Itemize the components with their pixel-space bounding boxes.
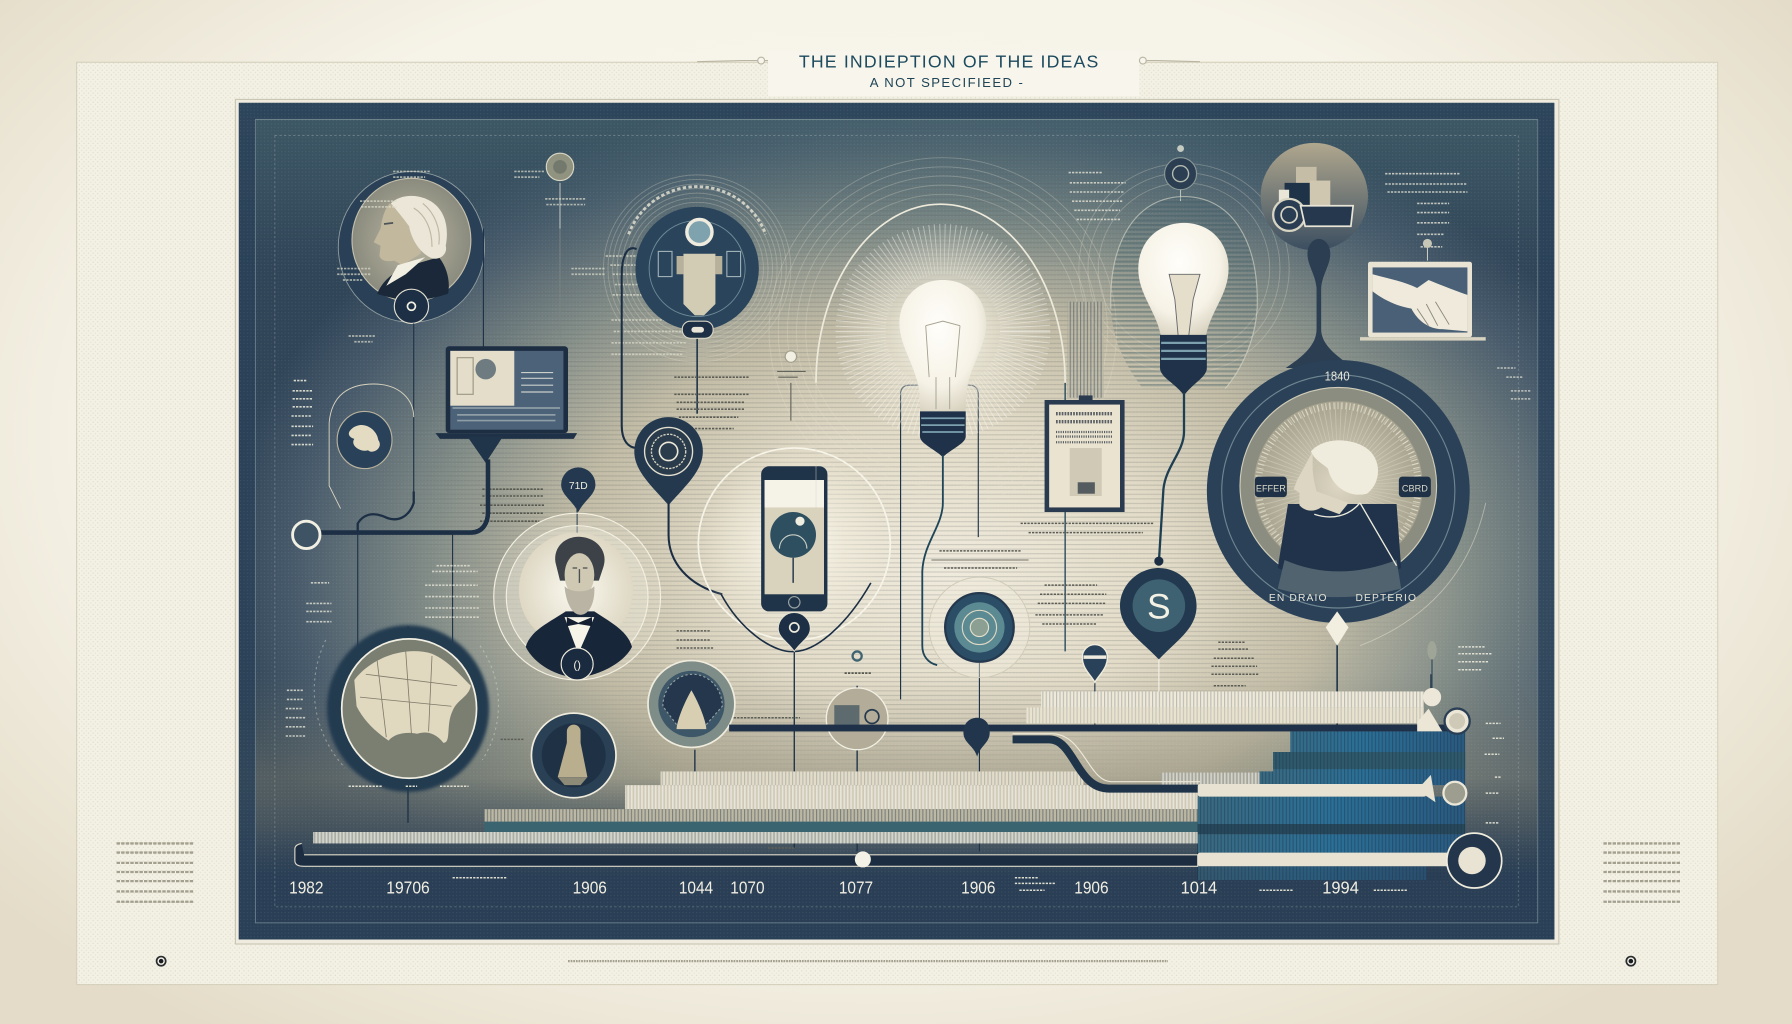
laptop pin	[467, 437, 503, 463]
portrait badge	[561, 648, 593, 680]
spiral emblem	[826, 651, 888, 750]
blue steps	[1198, 731, 1465, 880]
small shield marker	[1082, 645, 1107, 682]
connector with ring	[293, 459, 488, 549]
base timeline bar	[295, 833, 1502, 888]
bulb cord	[922, 455, 943, 665]
drop connector to big portrait	[1286, 239, 1354, 368]
phone with halo	[696, 446, 893, 652]
contour rings	[603, 158, 1486, 646]
diamond marker	[1326, 611, 1349, 646]
year labels: 1044	[679, 878, 714, 898]
side tag right: CBRD	[1402, 483, 1428, 493]
bottom captions	[1269, 593, 1417, 604]
globe map	[314, 625, 499, 792]
side text left	[117, 843, 194, 902]
light marker right	[1427, 641, 1437, 691]
bottom captions: EN DRAIO	[1269, 593, 1328, 604]
year labels: 1906	[573, 878, 607, 898]
connector lines	[358, 229, 1431, 880]
bulb cord	[1159, 393, 1184, 562]
year tag: 1840	[1325, 370, 1350, 384]
main dark timeline line	[729, 688, 1470, 757]
timeline small captions	[349, 786, 1408, 890]
right side labels of bars	[1485, 723, 1504, 823]
marker above phone	[777, 351, 806, 421]
year labels: 1070	[730, 878, 765, 898]
label right marker	[1458, 647, 1493, 670]
laptop	[435, 346, 577, 463]
left capsule label	[291, 381, 313, 445]
spiral medal	[634, 417, 703, 505]
phone pin	[778, 613, 810, 651]
large portrait medallion	[1207, 360, 1470, 646]
title block	[697, 50, 1200, 96]
pin 71D: 71D	[569, 481, 588, 492]
cream bar	[1198, 853, 1466, 866]
year labels: 1014	[1181, 878, 1218, 898]
marker	[845, 651, 871, 673]
pin 71D	[561, 467, 595, 512]
year labels: 1982	[289, 878, 323, 898]
labels under newspaper	[939, 523, 1154, 624]
small dark badge with antenna	[1165, 145, 1197, 201]
side tags	[1255, 477, 1287, 497]
curved cord to medal	[622, 248, 638, 448]
end knob	[1447, 833, 1502, 888]
newspaper document	[1045, 395, 1125, 512]
bottom captions: DEPTERIO	[1355, 593, 1417, 604]
cream steps left	[485, 771, 1198, 822]
year labels: 1994	[1322, 878, 1359, 898]
year labels: 1906	[1074, 878, 1109, 898]
teal band	[485, 822, 1198, 832]
label right of big portrait	[1497, 368, 1531, 399]
cream step upper right	[1026, 691, 1424, 723]
labels around first portrait	[337, 171, 686, 354]
side tag right	[1399, 477, 1431, 497]
left coin in capsule	[329, 384, 414, 509]
S-curve band	[1013, 739, 1200, 789]
main panel	[235, 99, 1559, 944]
timeline dot	[855, 851, 871, 867]
year labels: 1906	[961, 878, 995, 898]
upper node	[1423, 688, 1441, 706]
footer text	[568, 960, 1168, 962]
subtitle: A NOT SPECIFIEED -	[870, 75, 1023, 90]
handshake laptop	[1360, 239, 1486, 341]
label under laptop	[480, 489, 544, 521]
cream bar middle	[1198, 775, 1466, 805]
robot badge	[682, 321, 713, 338]
year labels: 19706	[386, 878, 430, 898]
dollar drop	[1120, 557, 1197, 659]
robot figure emblem	[629, 187, 766, 338]
large bulb	[816, 204, 1104, 665]
second bulb	[1111, 197, 1257, 562]
bell emblem	[531, 713, 616, 798]
heading: THE INDIEPTION OF THE IDEAS	[799, 51, 1098, 71]
side tags: EFFER	[1256, 483, 1286, 493]
portrait: wigged statesman	[338, 171, 485, 323]
side text right	[1603, 843, 1680, 902]
teal medallion	[929, 577, 1030, 678]
labels near emblems	[501, 631, 834, 848]
portrait badge	[394, 289, 429, 323]
year labels: 1077	[839, 878, 873, 898]
grey node	[1443, 782, 1466, 805]
label beside phone cord	[674, 377, 750, 429]
end node	[1445, 709, 1470, 734]
year labels	[289, 878, 1359, 898]
ring node	[293, 521, 320, 549]
peacock fan emblem	[648, 661, 735, 747]
bulb marker	[1423, 239, 1432, 261]
tractor emblem	[1261, 143, 1368, 250]
label right of shield	[1211, 642, 1259, 686]
cord medal to phone	[669, 503, 722, 594]
labels upper right	[1069, 173, 1467, 247]
portrait badge: ()	[573, 660, 581, 672]
bearded portrait	[494, 513, 661, 680]
heart pin	[963, 718, 990, 757]
labels left of globe	[286, 566, 480, 736]
registration dots	[157, 957, 1635, 966]
small medal	[546, 153, 574, 229]
stepped timeline bars	[313, 691, 1465, 880]
pale striped band	[313, 832, 1198, 843]
dollar drop: S	[1147, 586, 1171, 626]
